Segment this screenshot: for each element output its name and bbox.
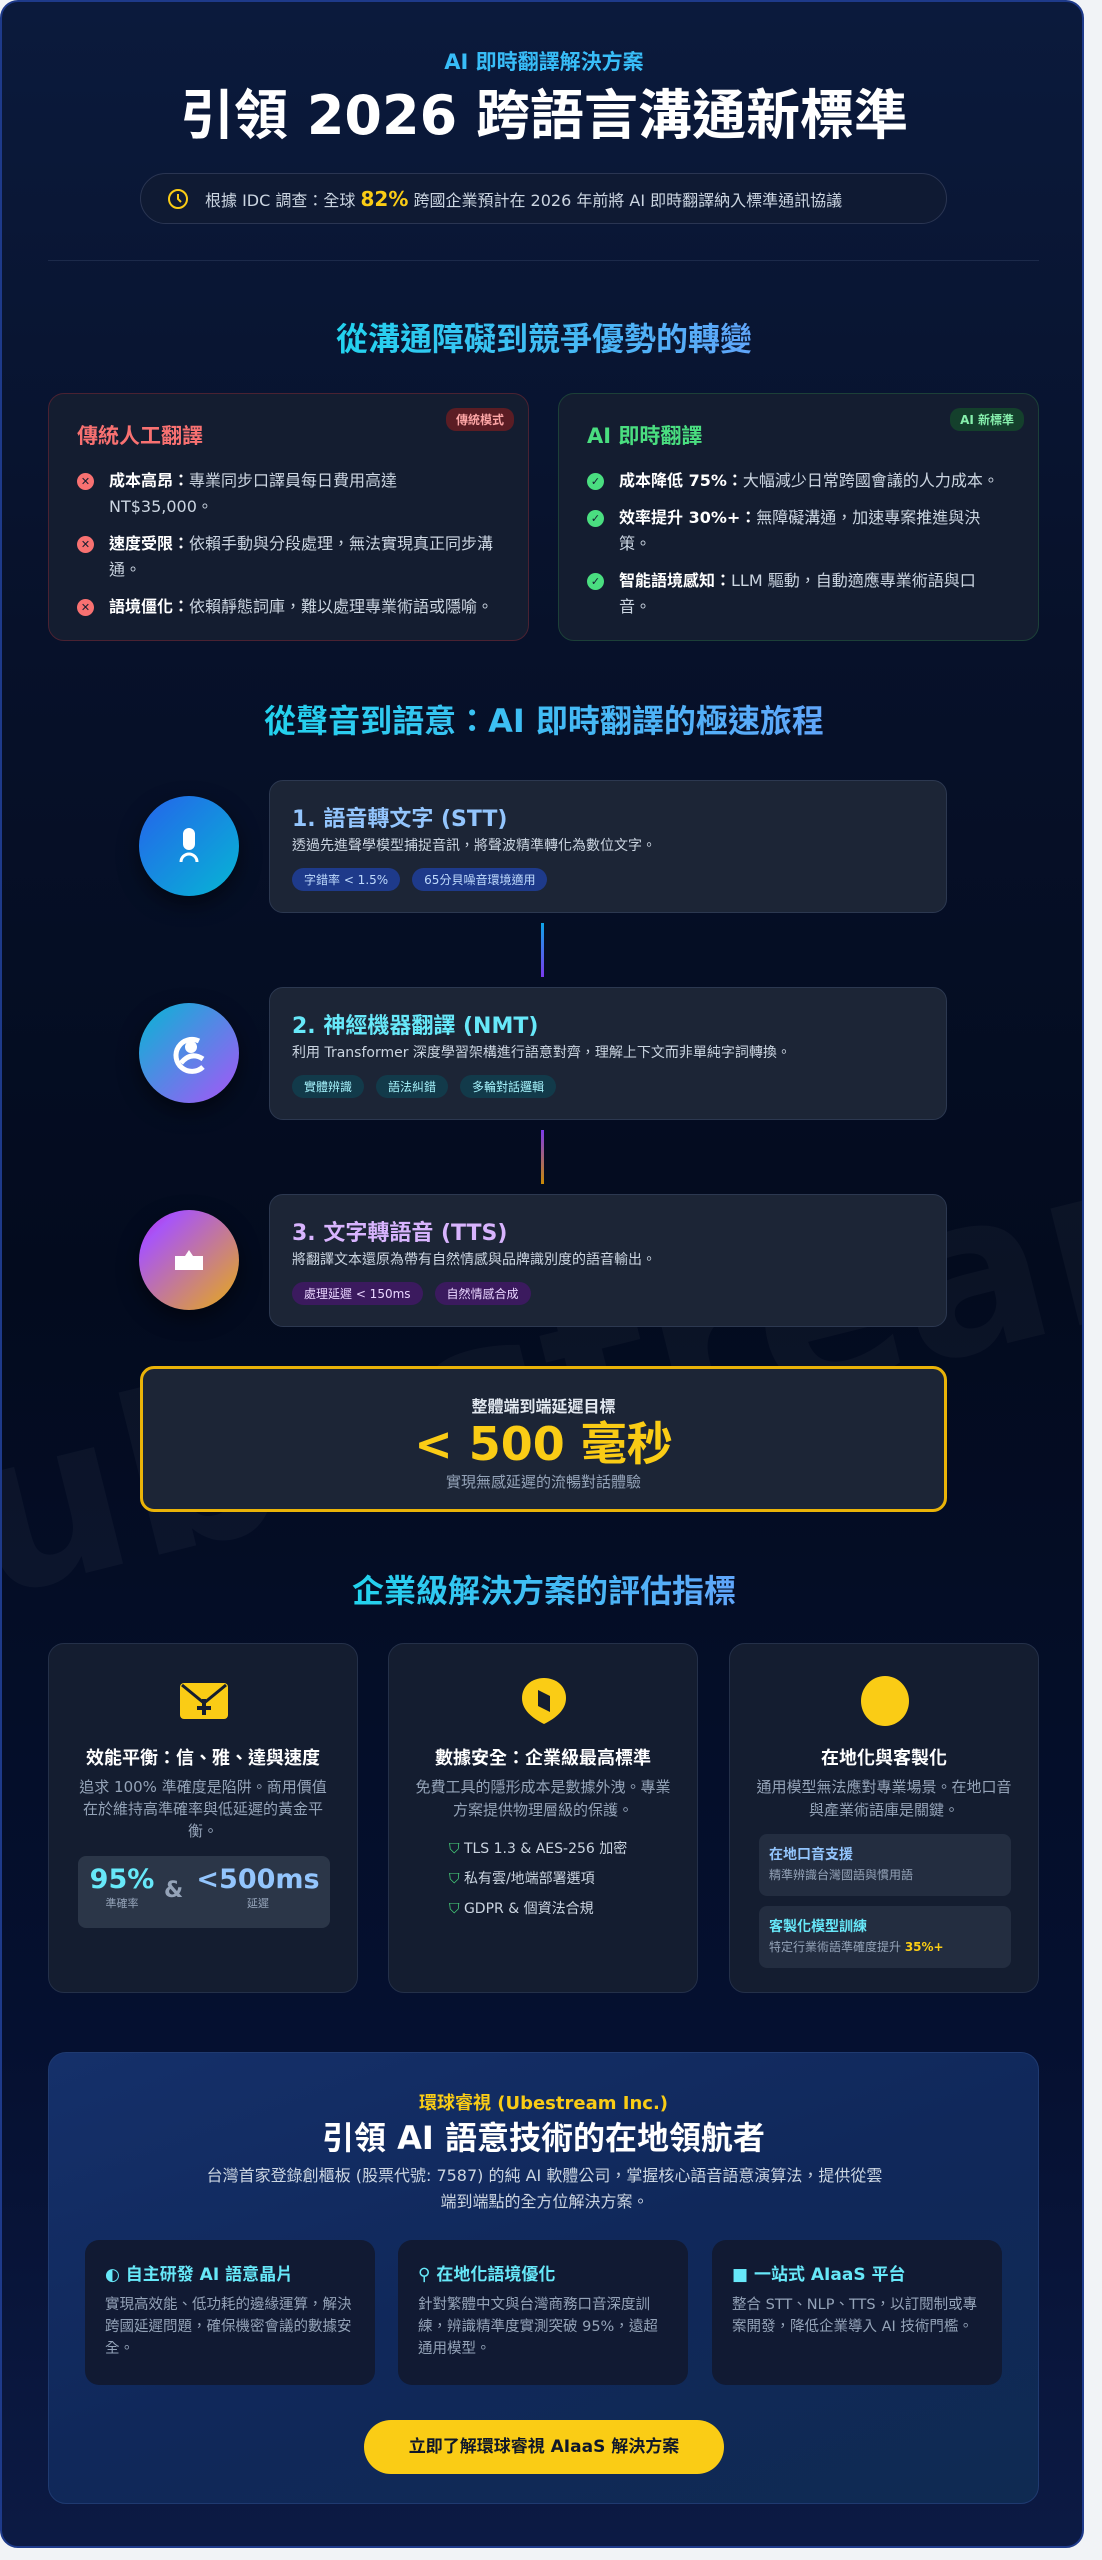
connector [541,923,544,977]
CTA button: 立即了解環球睿視 AIaaS 解決方案 [409,2437,679,2457]
panel: security: 免費工具的隱形成本是數據外洩。專業方案提供物理層級的保護。 [415,1778,670,1819]
subcard [759,1906,1011,1968]
feature: chip: 實現高效能、低功耗的邊緣運算，解決跨國延遲問題，確保機密會議的數據安全。 [105,2297,352,2357]
heading: section 3: 企業級解決方案的評估指標 [352,1572,736,1610]
step 3 card: 將翻譯文本還原為帶有自然情感與品牌識別度的語音輸出。 [292,1252,656,1268]
panel: security [388,1643,698,1993]
step 1 card [269,780,947,913]
badge: AI 新標準 [960,413,1014,427]
feature: chip [85,2240,375,2385]
subcard: 客製化模型訓練 [769,1919,867,1935]
list: ✕ [81,538,90,551]
feature: chip: ◐ 自主研發 AI 語意晶片 [105,2265,293,2285]
step 1 card: 1. 語音轉文字 (STT) [292,807,507,832]
step 2 card [269,987,947,1120]
badge [446,408,514,431]
checklist: ⛉ GDPR & 個資法合規 [449,1901,594,1917]
company heading: 引領 AI 語意技術的在地領航者 [322,2119,765,2157]
stat box: 95% [90,1864,154,1895]
list: 智能語境感知：LLM 驅動，自動適應專業術語與口音。 [619,571,976,616]
panel: performance [48,1643,358,1993]
latency callout [140,1366,947,1512]
step 2 card: 語法糾錯 [388,1080,436,1094]
icon: shield [522,1678,566,1724]
main title: 引領 2026 跨語言溝通新標準 [180,84,908,147]
step 3 card: 自然情感合成 [447,1287,519,1301]
stat box: 準確率 [106,1897,138,1910]
company eyebrow: 環球睿視 (Ubestream Inc.) [419,2093,668,2114]
feature: platform: 整合 STT、NLP、TTS，以訂閱制或專案開發，降低企業導入 AI 技術門檻。 [732,2297,977,2335]
feature: localization: 針對繁體中文與台灣商務口音深度訓練，辨識精準度實測突破 95%，遠超通用模型。 [418,2297,658,2357]
subcard: 在地口音支援 [769,1847,853,1863]
stat box: 延遲 [247,1897,269,1910]
subcard: 特定行業術語準確度提升 35%+ [769,1940,944,1954]
step 1 card: 透過先進聲學模型捕捉音訊，將聲波精準轉化為數位文字。 [292,838,656,854]
icon: clock [168,189,188,209]
list: 成本降低 75%：大幅減少日常跨國會議的人力成本。 [619,471,999,490]
feature: platform: ■ 一站式 AIaaS 平台 [732,2265,906,2285]
connector [541,1130,544,1184]
step 2 card: 實體辨識 [304,1080,352,1094]
latency callout: 整體端到端延遲目標 [471,1397,616,1416]
feature: localization: ⚲ 在地化語境優化 [418,2265,555,2285]
checklist: ⛉ 私有雲/地端部署選項 [449,1871,595,1887]
CTA button [364,2420,724,2474]
heading: AI 即時翻譯 [587,424,702,448]
feature: localization [398,2240,688,2385]
step 2 card: 利用 Transformer 深度學習架構進行語意對齊，理解上下文而非單純字詞轉換。 [292,1045,791,1061]
list [587,471,999,616]
stat pill: 根據 IDC 調查：全球 82% 跨國企業預計在 2026 年前將 AI 即時翻譯納入標準通訊協議 [205,187,842,211]
list: 語境僵化：依賴靜態詞庫，難以處理專業術語或隱喻。 [109,597,493,616]
icon: speaker circle [139,1210,239,1310]
step 2 card: 多輪對話邏輯 [472,1080,544,1094]
list: ✕ [81,601,90,614]
eyebrow subtitle: AI 即時翻譯解決方案 [444,50,644,74]
heading: 傳統人工翻譯 [77,424,203,448]
step 3 card [269,1194,947,1327]
step 1 card: 65分貝噪音環境適用 [424,873,535,887]
badge: 傳統模式 [456,413,504,427]
latency callout: 實現無感延遲的流暢對話體驗 [446,1473,641,1491]
step 2 card: 2. 神經機器翻譯 (NMT) [292,1014,538,1039]
description: 台灣首家登錄創櫃板 (股票代號: 7587) 的純 AI 軟體公司，掌握核心語音語意演算法，提供從雲端到端點的全方位解決方案。 [207,2166,882,2211]
heading: section 2: 從聲音到語意：AI 即時翻譯的極速旅程 [264,702,824,740]
stat box [78,1856,330,1928]
list [77,471,493,616]
badge [950,408,1024,431]
panel: AI [558,393,1039,641]
icon: brain circle [139,1003,239,1103]
icon: scale [180,1683,228,1719]
step 3 card: 處理延遲 < 150ms [304,1287,411,1301]
panel: traditional [48,393,529,641]
panel: performance: 追求 100% 準確度是陷阱。商用價值在於維持高準確率與低延遲的黃金平衡。 [79,1778,327,1840]
panel: company [48,2052,1039,2504]
list: ✓ [591,575,600,588]
stat box: <500ms [196,1864,320,1895]
step 3 card: 3. 文字轉語音 (TTS) [292,1221,507,1246]
step 1 card: 字錯率 < 1.5% [304,873,388,887]
checklist [449,1840,627,1917]
subcard [759,1834,1011,1896]
checklist: ⛉ TLS 1.3 & AES-256 加密 [449,1841,627,1857]
list: ✓ [591,512,600,525]
panel: localization: 在地化與客製化 [821,1748,947,1769]
heading: section 1: 從溝通障礙到競爭優勢的轉變 [336,320,752,358]
icon: mic circle [139,796,239,896]
subcard: 精準辨識台灣國語與慣用語 [769,1868,913,1882]
stat pill [140,173,947,224]
latency callout: < 500 毫秒 [414,1417,673,1471]
icon: globe [861,1676,909,1726]
panel: localization: 通用模型無法應對專業場景。在地口音與產業術語庫是關鍵。 [756,1778,1012,1819]
list: 效率提升 30%+：無障礙溝通，加速專案推進與決策。 [619,508,980,553]
list: ✕ [81,475,90,488]
panel: performance: 效能平衡：信、雅、達與速度 [86,1748,320,1769]
feature: platform [712,2240,1002,2385]
list: 成本高昂：專業同步口譯員每日費用高達 NT$35,000。 [109,471,397,516]
list: 速度受限：依賴手動與分段處理，無法實現真正同步溝通。 [109,534,493,579]
panel: security: 數據安全：企業級最高標準 [435,1748,651,1769]
stat box: & [164,1878,183,1903]
panel: localization [729,1643,1039,1993]
list: ✓ [591,475,600,488]
